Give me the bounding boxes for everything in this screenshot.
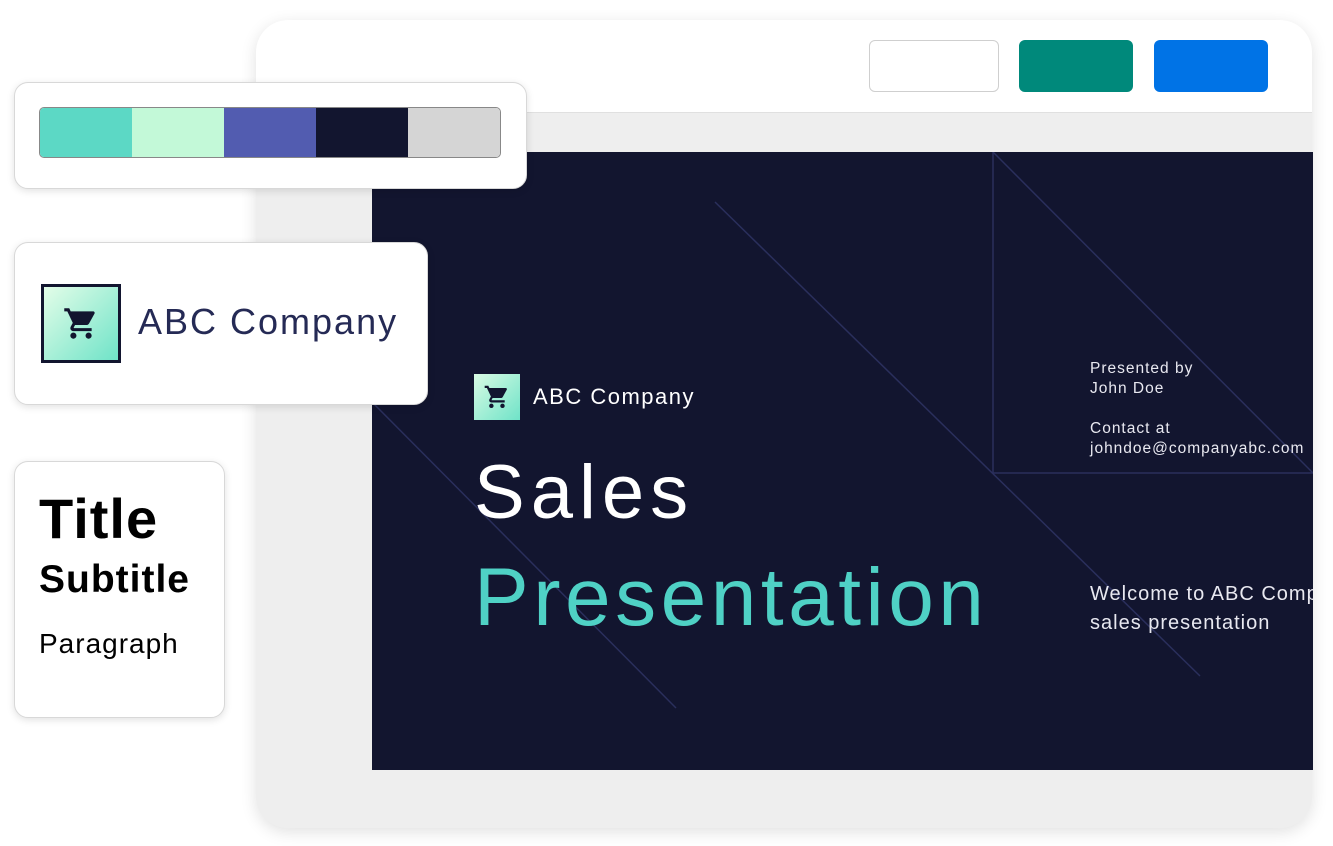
presenter info: [1090, 360, 1304, 457]
slide logo: [474, 374, 695, 420]
icon: cart small: [474, 374, 520, 420]
presenter info: John Doe: [1090, 380, 1164, 397]
subtitle sample: Subtitle: [39, 558, 190, 601]
heading: Sales: Sales: [474, 450, 694, 535]
welcome text: [1090, 583, 1313, 634]
icon: cart: [41, 284, 121, 363]
toolbar: [256, 20, 1312, 113]
heading: Presentation: Presentation: [474, 552, 988, 643]
panel: color palette: [14, 82, 527, 189]
button: teal: [1019, 40, 1133, 92]
slide company name: ABC Company: [533, 384, 695, 409]
slide: [372, 152, 1313, 770]
presenter info: Contact at: [1090, 420, 1171, 437]
decorative lines: [374, 152, 1313, 708]
presenter info: johndoe@companyabc.com: [1090, 440, 1304, 457]
presenter info: Presented by: [1090, 360, 1193, 377]
panel: typography: [14, 461, 225, 718]
button: outline: [869, 40, 999, 92]
browser window: [256, 20, 1312, 828]
panel: logo: [14, 242, 428, 405]
title sample: Title: [39, 487, 158, 550]
button: blue: [1154, 40, 1268, 92]
swatches: [39, 107, 501, 158]
welcome text: sales presentation: [1090, 612, 1270, 634]
paragraph sample: Paragraph: [39, 628, 179, 659]
company name: ABC Company: [138, 301, 398, 342]
